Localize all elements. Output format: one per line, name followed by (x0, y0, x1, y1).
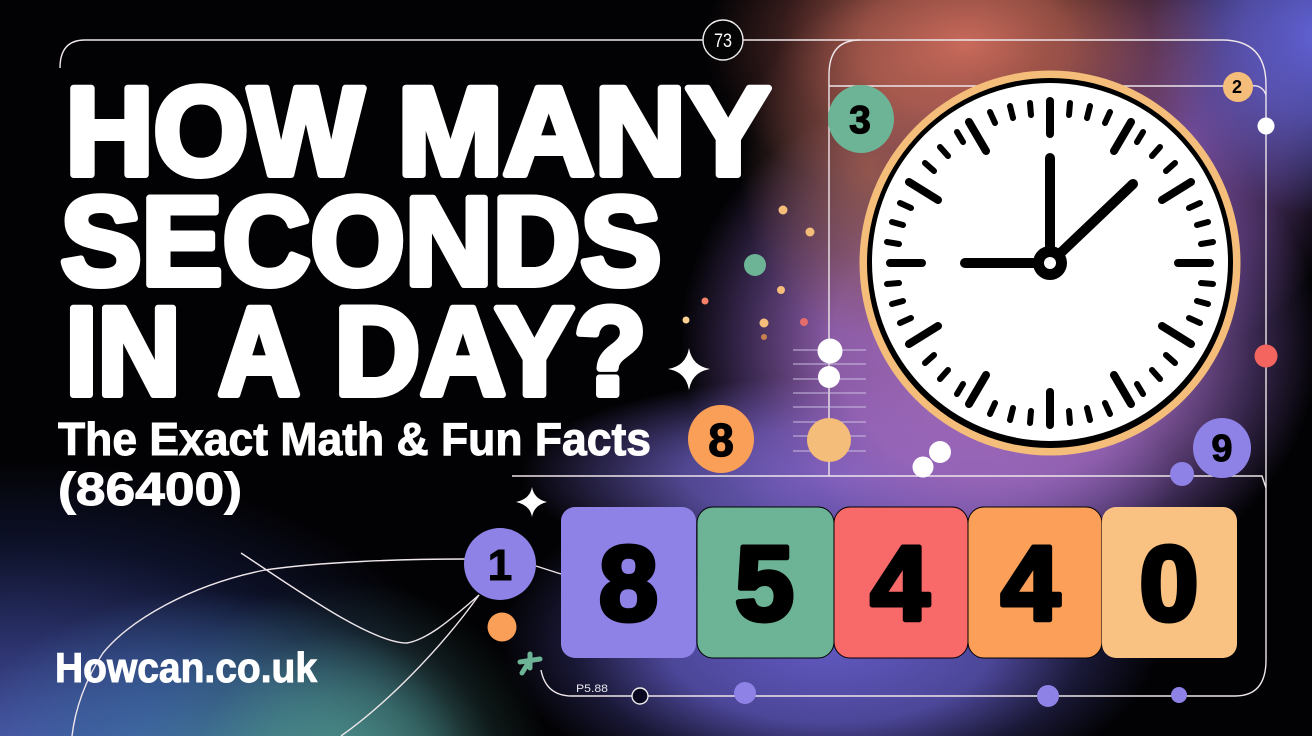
sparkles (516, 348, 710, 517)
badge: top counter: 73 (714, 31, 732, 52)
badge: 1: 1 (488, 541, 512, 590)
tile: 4 second (968, 507, 1102, 658)
tile: 5 (697, 507, 834, 658)
tile: 4 second: 4 (1001, 525, 1060, 643)
badge: 3 (828, 85, 894, 153)
title: SECONDS (60, 172, 662, 312)
small rail label: P5.88 (576, 683, 608, 695)
badge: 3: 3 (849, 99, 871, 142)
title: IN (66, 282, 180, 422)
badge: 9: 9 (1211, 428, 1233, 470)
website label: Howcan.co.uk (55, 644, 318, 691)
badge: top counter (703, 20, 743, 60)
title (60, 62, 770, 422)
tile: 0: 0 (1140, 525, 1198, 643)
subtitle (58, 413, 651, 515)
tile: 4 (834, 507, 968, 658)
clock (860, 70, 1240, 456)
icon: green squiggle (520, 654, 540, 673)
clock hour ticks (890, 101, 1210, 425)
title: HOW (66, 62, 364, 202)
subtitle: The Exact Math & Fun Facts (58, 413, 651, 465)
badge: 8: 8 (708, 414, 734, 466)
badge: 2: 2 (1232, 77, 1242, 97)
tile: 8: 8 (599, 525, 658, 643)
clock hub (1033, 246, 1067, 280)
title: A (218, 282, 300, 422)
badge: 2 (1223, 72, 1253, 102)
decorative dots (488, 118, 1278, 642)
digit tiles (561, 507, 1237, 658)
tile: 4: 4 (871, 525, 930, 643)
title: MANY (398, 62, 770, 202)
tile: 0 (1102, 507, 1237, 658)
title: DAY? (334, 282, 646, 422)
subtitle: (86400) (58, 463, 242, 515)
badge: 9 (1193, 418, 1251, 478)
rail markers (632, 682, 1187, 707)
clock hands (965, 158, 1133, 263)
badge: 8 (688, 405, 754, 473)
tile: 8 (561, 507, 696, 658)
tile: 5: 5 (735, 525, 794, 643)
clock minute ticks (887, 103, 1213, 423)
badge: 1 (464, 528, 536, 600)
